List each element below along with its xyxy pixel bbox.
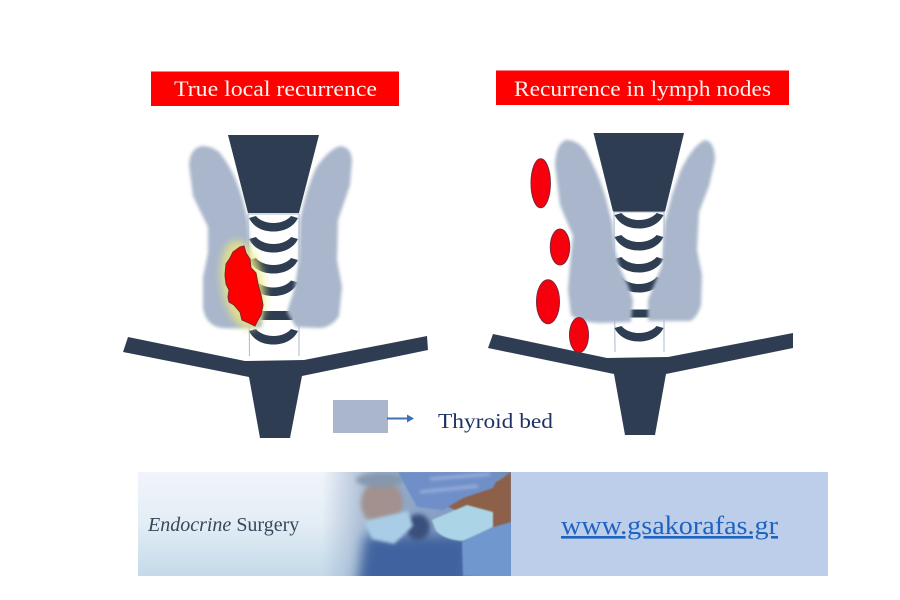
- diagram: true local recurrence: [123, 135, 428, 438]
- lymph node 2: [550, 229, 570, 265]
- infographic canvas: [123, 70, 828, 576]
- tumour: [225, 246, 263, 326]
- recurrence glow: [215, 237, 271, 333]
- larynx: [594, 133, 684, 212]
- blurred surgeon in background: [350, 472, 472, 576]
- lymph node 1: [531, 159, 550, 208]
- tracheal rings: [614, 213, 664, 342]
- trachea outline: [248, 214, 299, 356]
- lymph node 4: [570, 318, 588, 352]
- legend label: Thyroid bed: [438, 409, 554, 433]
- legend: thyroid bed: [333, 400, 554, 433]
- surgeon in foreground: [398, 472, 511, 576]
- trachea outline: [614, 212, 664, 352]
- heading: true local recurrence: True local recurrence: [174, 76, 377, 101]
- website link: www.gsakorafas.gr: [561, 511, 778, 540]
- thyroid lobes: [555, 140, 715, 323]
- banner: endocrine surgery photo: [138, 472, 511, 576]
- legend swatch: [333, 400, 388, 433]
- larynx: [228, 135, 319, 213]
- heading: recurrence in lymph nodes: [496, 70, 789, 105]
- heading: true local recurrence: [151, 72, 399, 106]
- clavicles and sternum: [123, 336, 428, 438]
- banner: endocrine surgery label: Endocrine Surgery: [147, 514, 299, 536]
- diagram: recurrence in lymph nodes: [488, 133, 793, 435]
- banner: website panel: [511, 472, 828, 576]
- clavicles and sternum: [488, 333, 793, 435]
- heading: recurrence in lymph nodes: Recurrence in lymph nodes: [514, 76, 771, 101]
- thyroid lobes: [189, 146, 352, 328]
- lymph node 3: [536, 280, 560, 324]
- legend arrow: [387, 414, 414, 422]
- tracheal rings: [249, 216, 298, 344]
